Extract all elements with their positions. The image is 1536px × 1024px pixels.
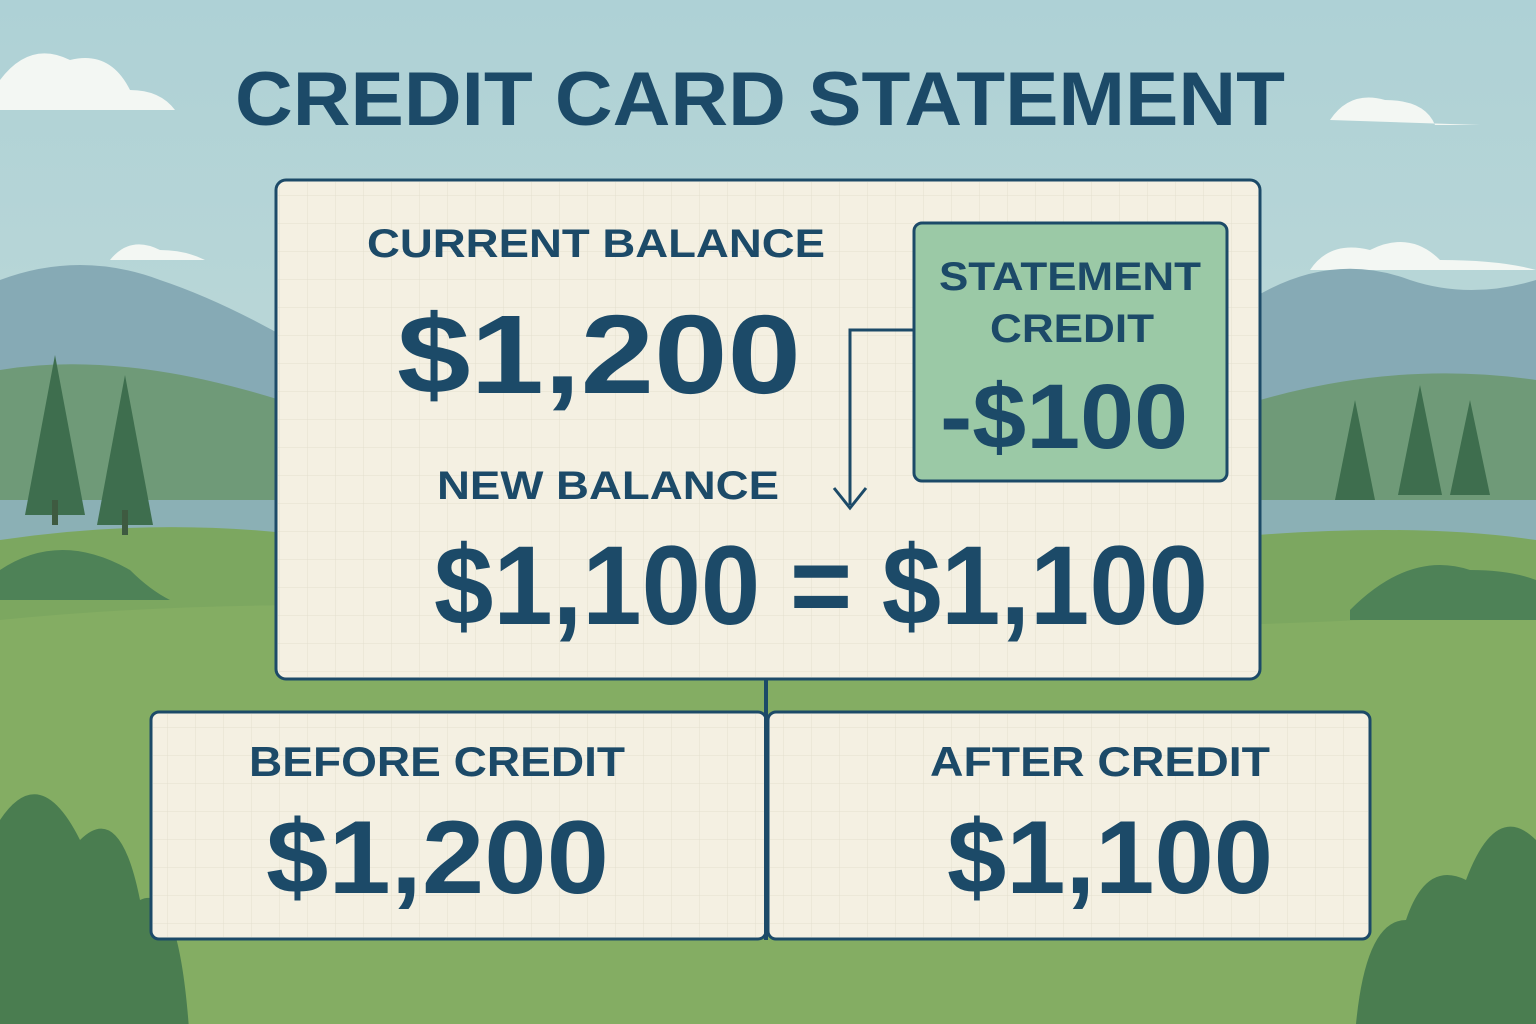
current balance label: CURRENT BALANCE xyxy=(367,222,825,266)
arrow xyxy=(834,330,914,508)
current balance amount: $1,200 xyxy=(397,292,801,417)
callout: statement credit: STATEMENT xyxy=(939,255,1201,299)
panel: after credit xyxy=(768,712,1370,939)
callout: statement credit xyxy=(914,223,1227,481)
panel: before credit: BEFORE CREDIT xyxy=(249,738,625,785)
connector line xyxy=(764,678,768,940)
new balance equation: $1,100 = $1,100 xyxy=(434,523,1208,648)
callout: statement credit: -$100 xyxy=(940,366,1188,468)
panel: main statement xyxy=(276,180,1260,679)
new balance label: NEW BALANCE xyxy=(437,464,779,508)
callout: statement credit: CREDIT xyxy=(990,307,1154,351)
panel: after credit: $1,100 xyxy=(947,800,1273,916)
title: CREDIT CARD STATEMENT xyxy=(235,57,1285,142)
panel: before credit: $1,200 xyxy=(266,800,609,916)
panel: after credit: AFTER CREDIT xyxy=(930,738,1270,785)
panel: before credit xyxy=(151,712,766,939)
